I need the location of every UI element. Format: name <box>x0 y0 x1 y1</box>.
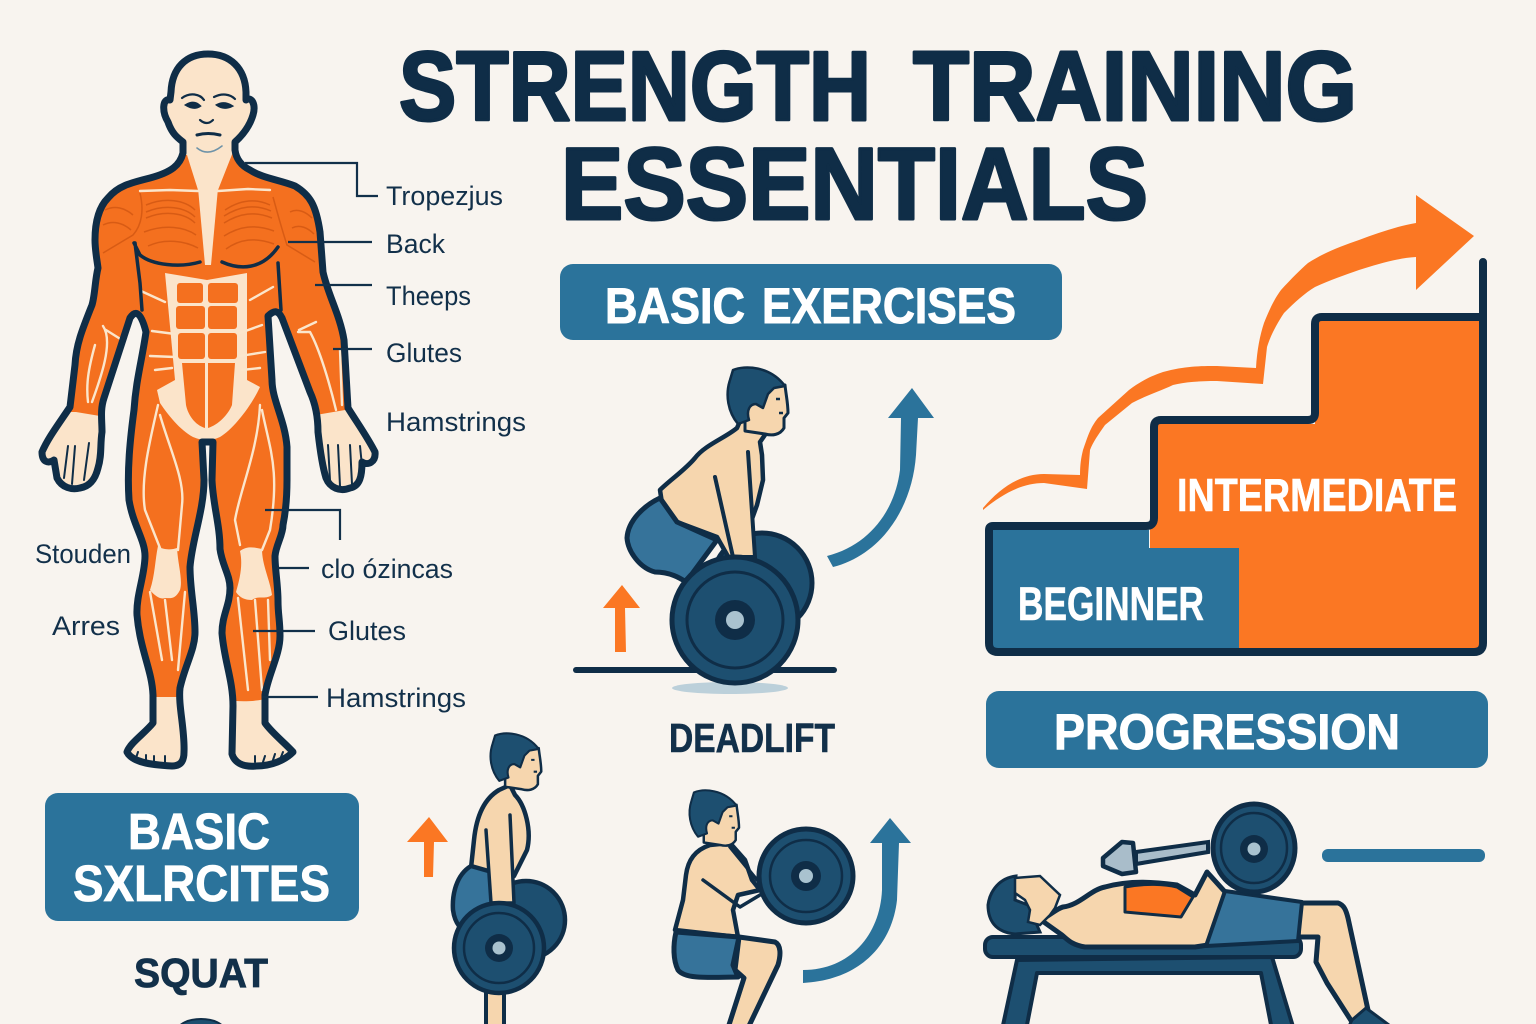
fingers and toes <box>64 443 362 762</box>
anatomy labels: Glutes <box>386 338 462 368</box>
heading: basic exercises: EXERCISES <box>762 278 1016 334</box>
arm <box>486 815 514 903</box>
icon: partial weight at bottom <box>178 1019 224 1024</box>
title: TRAINING <box>913 31 1357 141</box>
chest contours <box>103 193 315 262</box>
step outline <box>989 262 1483 652</box>
torso <box>471 785 529 876</box>
sternum <box>198 188 218 265</box>
arrow: standing lift orange up <box>407 817 448 877</box>
shorts <box>453 866 492 935</box>
anatomy labels: Stouden <box>35 539 131 569</box>
feet skin <box>130 697 288 763</box>
heading: basic exercises <box>560 264 1062 340</box>
head <box>491 733 541 790</box>
heading: progression: PROGRESSION <box>1054 704 1400 760</box>
stair label: beginner: BEGINNER <box>1018 577 1204 630</box>
head <box>690 790 739 846</box>
title: STRENGTH <box>399 31 871 141</box>
anatomy labels: Tropezjus <box>386 181 503 211</box>
anatomy labels: clo ózincas <box>321 554 453 584</box>
heading: basic exercises: BASIC <box>605 278 745 334</box>
face <box>1015 876 1060 925</box>
pectoral and armpit shadows <box>134 243 281 310</box>
bar <box>1103 842 1208 874</box>
rear thigh and leg <box>728 937 780 1024</box>
torso <box>675 843 760 937</box>
heading: basic sxlrcites: BASIC <box>128 803 270 860</box>
arrow: progression <box>983 195 1474 510</box>
rear plate <box>712 533 812 633</box>
standing lift figure <box>453 733 565 1024</box>
shirt <box>1125 884 1193 917</box>
arrow: deadlift blue curve <box>827 388 934 567</box>
orange steps <box>1150 321 1483 651</box>
title <box>399 31 1357 241</box>
anatomy labels: Glutes <box>328 616 406 646</box>
plate <box>1213 804 1295 892</box>
stair label: intermediate: INTERMEDIATE <box>1177 469 1457 521</box>
head <box>728 367 788 435</box>
head and neck skin <box>167 58 251 190</box>
knees <box>150 546 272 600</box>
torso <box>1041 872 1226 947</box>
abdominal blocks <box>176 283 238 428</box>
hair <box>988 876 1040 934</box>
abdominal frame <box>157 273 260 440</box>
anatomy labels <box>35 163 526 713</box>
blue bar <box>1322 849 1485 862</box>
face <box>182 94 235 152</box>
shadow <box>672 682 788 694</box>
arrow: squat blue curve <box>803 818 911 983</box>
front squat figure <box>674 790 853 1024</box>
floor bar <box>573 667 837 673</box>
title: ESSENTIALS <box>561 127 1148 241</box>
torso <box>660 410 767 560</box>
label: deadlift: DEADLIFT <box>669 715 835 761</box>
shoe <box>1348 1008 1393 1024</box>
hands skin <box>45 410 372 486</box>
anatomy figure <box>30 40 400 775</box>
deadlift figure <box>573 367 837 694</box>
arm <box>703 847 760 907</box>
anatomy labels: Theeps <box>386 281 471 311</box>
legs <box>486 985 504 1024</box>
arrow: deadlift orange up <box>603 585 640 652</box>
bench <box>985 937 1301 1024</box>
heading: basic sxlrcites: SXLRCITES <box>73 855 330 912</box>
front plate <box>672 557 798 683</box>
plate <box>759 829 853 923</box>
heading: basic sxlrcites <box>45 793 359 921</box>
muscle lines <box>87 189 342 690</box>
shorts <box>627 498 717 582</box>
anatomy labels: Hamstrings <box>386 407 526 437</box>
leg <box>1298 903 1368 1022</box>
bench press figure <box>985 804 1393 1024</box>
rear plate <box>487 881 565 959</box>
anatomy labels: Back <box>386 229 445 259</box>
arm <box>715 452 755 557</box>
heading: progression <box>986 691 1488 768</box>
shorts <box>1206 891 1302 946</box>
front plate <box>454 903 544 993</box>
label: squat: SQUAT <box>134 950 268 996</box>
anatomy labels: Arres <box>52 611 120 641</box>
stair chart <box>989 262 1483 652</box>
anatomy labels: Hamstrings <box>326 683 466 713</box>
blue step <box>990 530 1239 652</box>
shorts <box>674 932 739 977</box>
